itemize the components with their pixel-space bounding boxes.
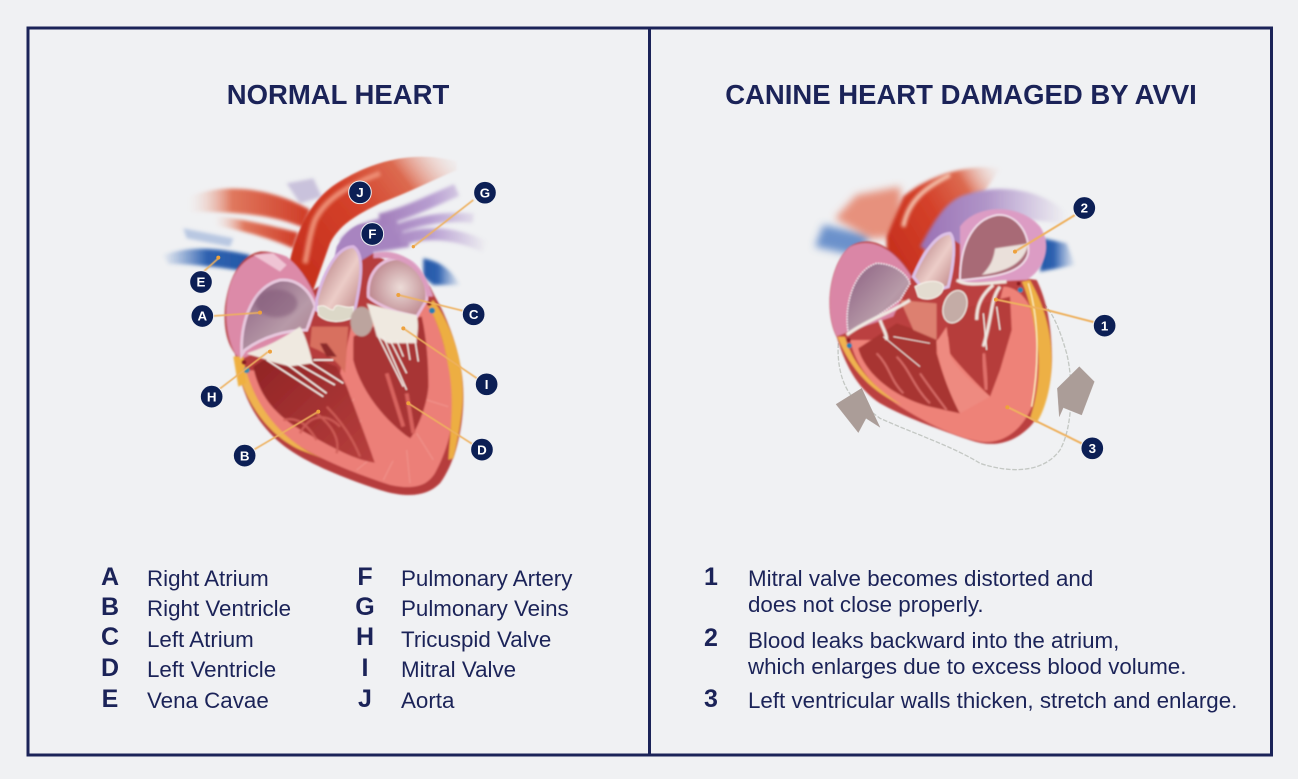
legend: normal heart, left column: D xyxy=(101,654,119,682)
pulmonary artery xyxy=(327,223,373,297)
callout numbers xyxy=(1081,201,1109,456)
outer wall band: left ventricle xyxy=(1022,280,1052,423)
pulmonary trunk cavity xyxy=(317,247,361,319)
right ventricle cavity xyxy=(253,347,375,463)
valve markers xyxy=(847,338,851,342)
right ventricle cavity xyxy=(858,323,960,413)
left ventricle cavity xyxy=(350,317,428,438)
legend: normal heart, right column: Aorta xyxy=(401,688,454,713)
aorta xyxy=(287,157,457,290)
callout badges xyxy=(1073,197,1116,460)
tricuspid valve leaflets xyxy=(847,300,910,340)
numbered list: AVVI effects: Blood leaks backward into the atrium, xyxy=(748,628,1119,652)
callout letters: A xyxy=(198,309,208,324)
valve markers xyxy=(242,360,246,365)
heart outer xyxy=(830,240,1052,444)
pulmonary veins xyxy=(287,178,485,263)
callout badges xyxy=(190,181,498,467)
numbered list: AVVI effects: Mitral valve becomes distorted and xyxy=(748,566,1093,591)
legend: normal heart, right column: G xyxy=(355,593,375,621)
right atrium cavity xyxy=(242,280,315,355)
aorta xyxy=(887,167,1000,280)
heading: damaged heart: CANINE HEART DAMAGED BY AVVI xyxy=(725,79,1197,110)
legend: normal heart, right column: Tricuspid Valve xyxy=(401,627,551,652)
myocardium xyxy=(240,303,454,487)
legend: normal heart, right column: Pulmonary Veins xyxy=(401,596,569,621)
callout numbers: 2 xyxy=(1081,201,1088,216)
mitral valve xyxy=(367,303,418,343)
outer wall band: right ventricle xyxy=(235,357,327,460)
enlarged atrium highlight xyxy=(982,243,1028,275)
aortic valve bulb xyxy=(939,287,971,326)
tricuspid valve xyxy=(247,327,313,367)
numbered list: AVVI effects: 3 xyxy=(704,685,718,713)
aortic branches xyxy=(835,187,903,238)
callout letters: F xyxy=(368,227,376,242)
legend: normal heart, left column: C xyxy=(101,623,119,651)
legend: normal heart, left column: Left Ventricle xyxy=(147,657,276,682)
leader lines xyxy=(202,200,487,455)
outer wall band: right ventricle xyxy=(837,337,902,405)
callout letters: C xyxy=(469,307,479,322)
legend: normal heart, right column: Mitral Valve xyxy=(401,657,516,682)
legend: normal heart, right column: H xyxy=(356,623,374,651)
legend: normal heart, right column: F xyxy=(357,563,373,591)
mitral valve leaflets xyxy=(957,280,1007,347)
legend: normal heart, left column: Vena Cavae xyxy=(147,688,269,713)
myocardium xyxy=(850,287,1038,442)
legend: normal heart, left column: A xyxy=(101,563,119,591)
numbered list: AVVI effects: 2 xyxy=(704,624,718,652)
numbered list: AVVI effects: which enlarges due to excess blood volume. xyxy=(748,654,1186,679)
right atrium wall xyxy=(830,243,912,337)
aortic branches xyxy=(190,189,310,248)
callout letters: J xyxy=(356,185,364,200)
aortic root xyxy=(310,327,348,373)
numbered list: AVVI effects: does not close properly. xyxy=(748,592,984,617)
callout letters: D xyxy=(477,442,487,457)
legend: normal heart, left column: B xyxy=(101,593,119,621)
leader lines xyxy=(995,215,1105,448)
pulmonary veins xyxy=(920,189,1067,270)
aortic valve bulb xyxy=(350,307,373,337)
vena cavae xyxy=(815,225,870,257)
grey arrows xyxy=(836,388,880,433)
heart outer xyxy=(225,252,463,495)
outer wall band: left ventricle xyxy=(427,300,463,460)
legend: normal heart, left column: Left Atrium xyxy=(147,627,254,652)
left ventricle cavity xyxy=(947,297,1012,397)
numbered list: AVVI effects: Left ventricular walls thicken, stretch and enlarge. xyxy=(748,688,1237,713)
legend: normal heart, right column: J xyxy=(358,685,372,713)
aortic outflow xyxy=(900,300,937,340)
legend: normal heart, right column: Pulmonary Artery xyxy=(401,566,572,591)
callout letters: E xyxy=(197,275,206,290)
callout letters xyxy=(197,185,490,463)
numbered list: AVVI effects xyxy=(704,563,1237,713)
callout letters: I xyxy=(485,377,488,392)
left atrium cavity xyxy=(368,258,427,317)
left atrium cavity xyxy=(960,215,1028,280)
right atrium cavity xyxy=(847,263,910,333)
pulmonary trunk cavity xyxy=(913,233,954,293)
numbered list: AVVI effects: 1 xyxy=(704,563,718,591)
legend: normal heart, left column xyxy=(101,563,291,713)
legend: normal heart, left column: E xyxy=(102,685,118,713)
vena cavae xyxy=(163,228,460,285)
illustration: damaged heart xyxy=(815,167,1116,470)
legend: normal heart, left column: Right Atrium xyxy=(147,566,269,591)
callout letters: B xyxy=(240,448,250,463)
illustration: normal heart xyxy=(163,157,498,495)
heading: normal heart: NORMAL HEART xyxy=(227,79,449,110)
callout letters: G xyxy=(480,185,490,200)
legend: normal heart, right column xyxy=(355,563,572,713)
septum xyxy=(343,317,410,463)
septum xyxy=(937,327,990,413)
legend: normal heart, left column: Right Ventricle xyxy=(147,596,291,621)
legend: normal heart, right column: I xyxy=(362,654,368,682)
callout numbers: 3 xyxy=(1089,441,1096,456)
left atrium wall xyxy=(960,209,1046,283)
dashed normal-size outline xyxy=(838,303,1071,470)
callout numbers: 1 xyxy=(1101,318,1109,333)
callout letters: H xyxy=(207,389,216,404)
right atrium wall xyxy=(226,253,317,360)
